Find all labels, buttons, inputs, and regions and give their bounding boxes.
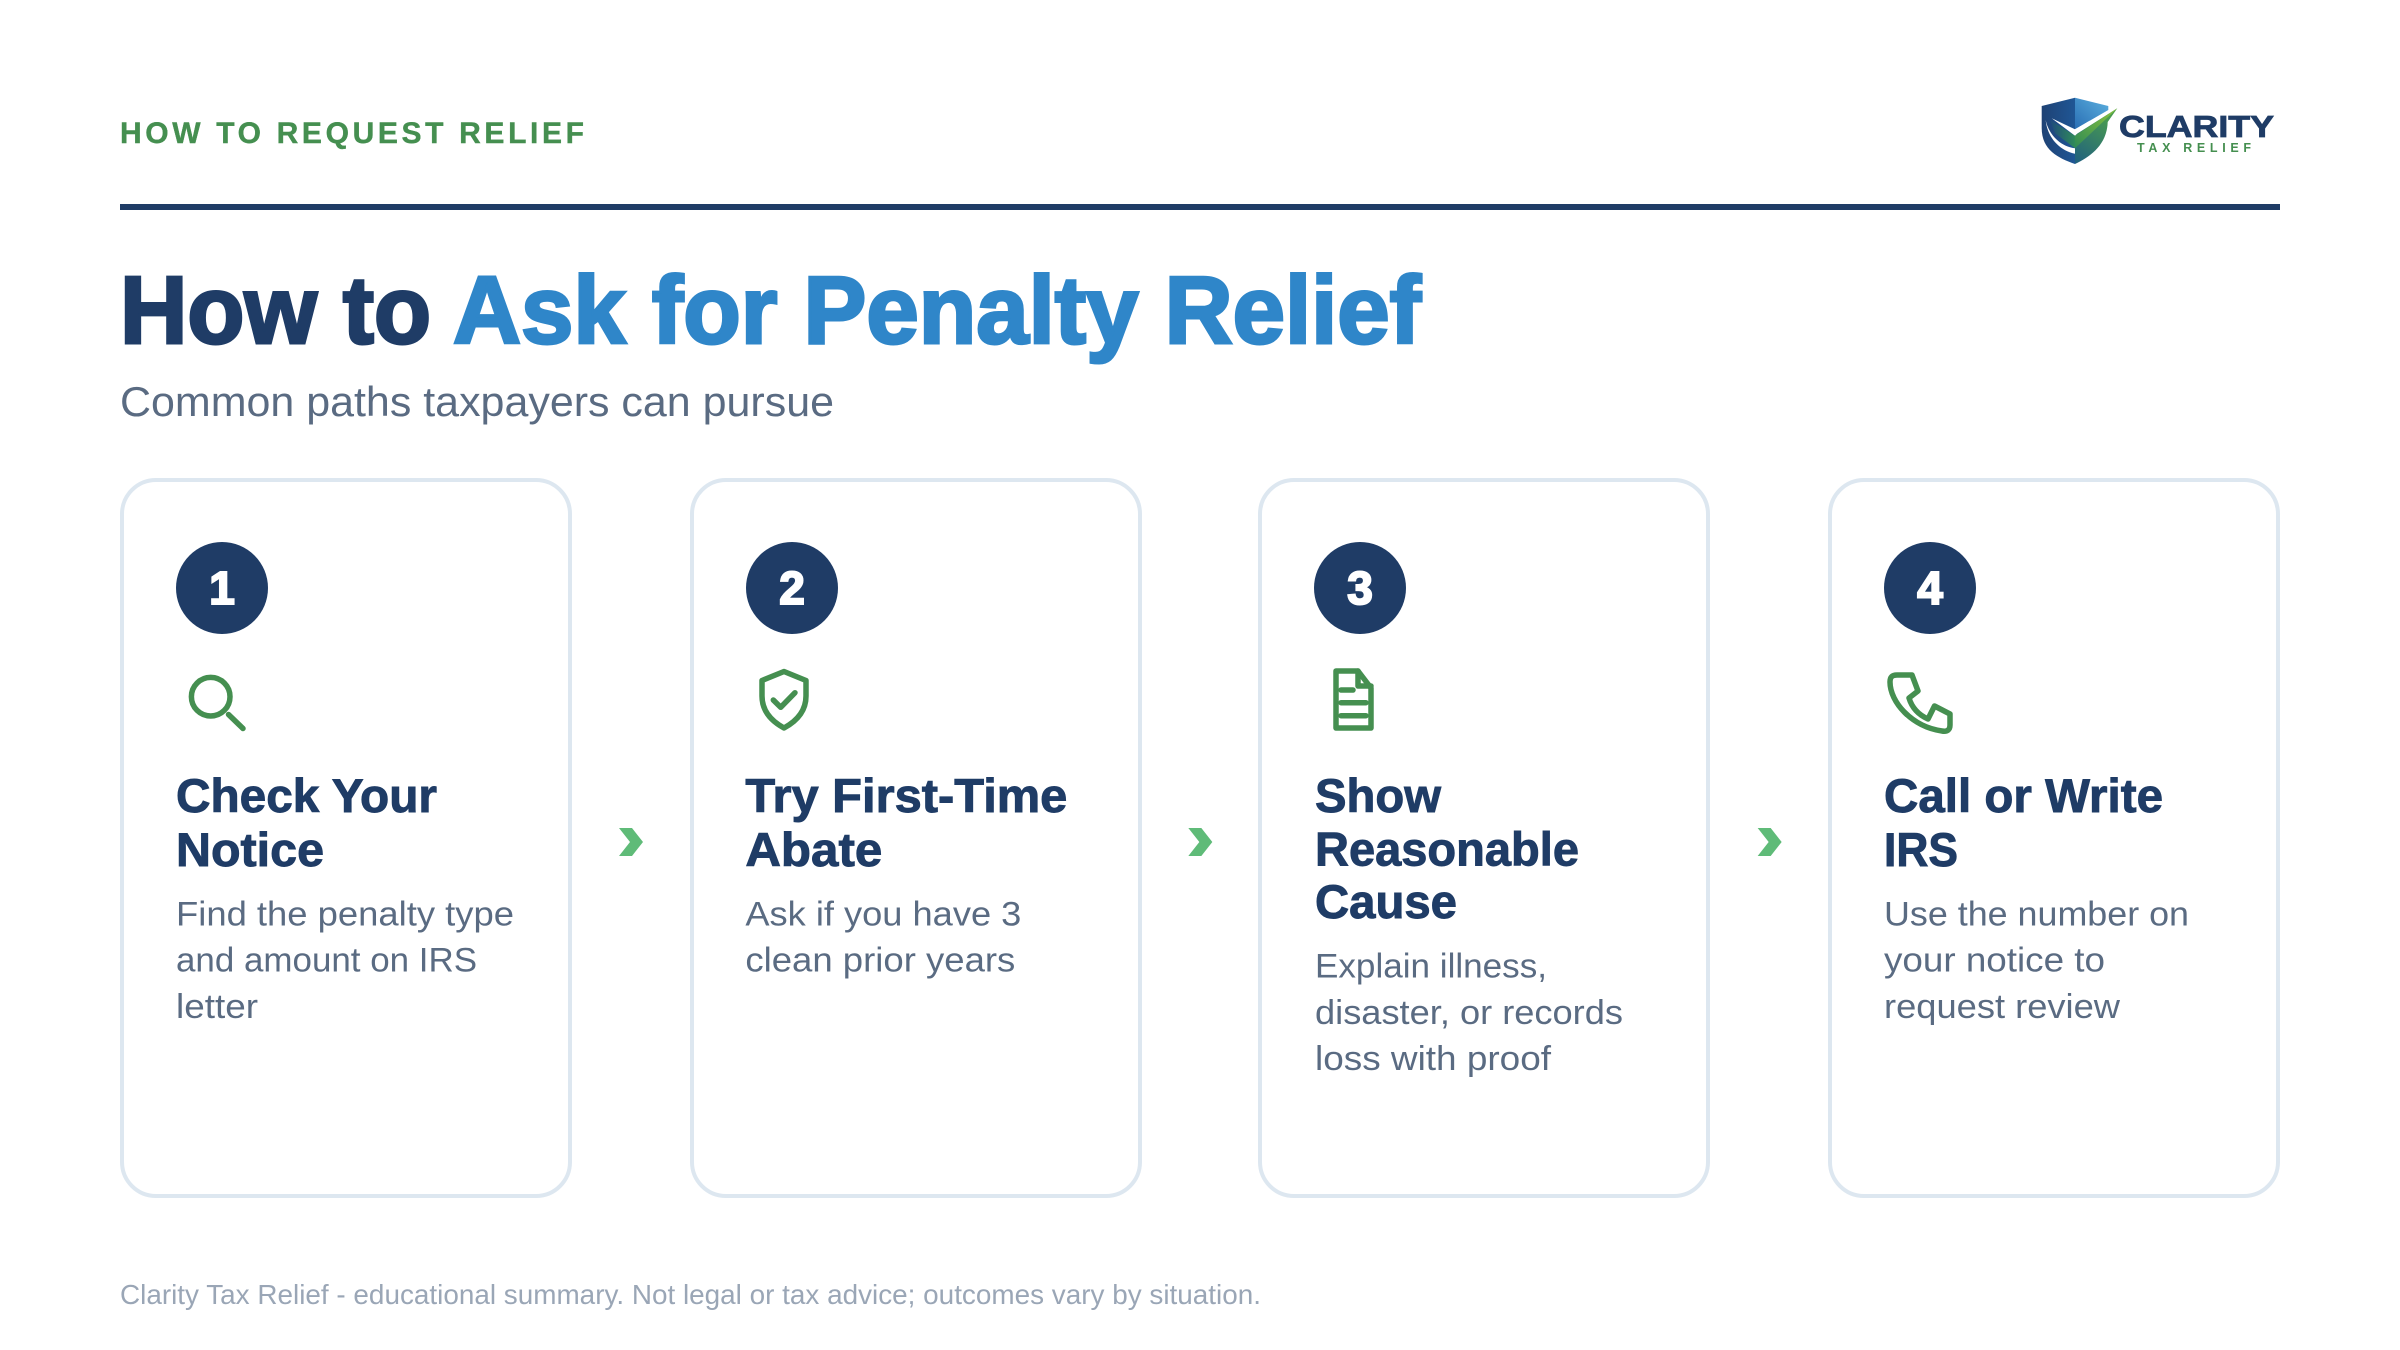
panel: step 1 check your notice: [122, 480, 570, 1196]
body text: Ask if you have 3: [745, 896, 1021, 934]
heading: check your notice: Check Your: [176, 769, 437, 822]
heading: show reasonable cause: [1315, 769, 1579, 928]
heading: call or write irs: IRS: [1884, 823, 1958, 876]
body text: disaster, or records: [1315, 994, 1623, 1032]
heading: check your notice: Notice: [176, 823, 324, 876]
step number 3: 3: [1347, 562, 1373, 614]
icon: phone: [1890, 675, 1950, 731]
step number 2: 2: [779, 562, 805, 614]
icon: magnifying glass: [191, 677, 243, 728]
body text: [1315, 948, 1623, 1078]
step number 2: [746, 542, 838, 634]
logo tagline: TAX RELIEF: [2137, 141, 2251, 155]
body text: loss with proof: [1315, 1040, 1552, 1078]
header rule: [120, 204, 2280, 210]
arrow 1: [619, 828, 643, 856]
logo shield mark: [2042, 98, 2117, 164]
body text: clean prior years: [745, 942, 1015, 980]
body text: Use the number on: [1884, 896, 2189, 934]
icon: shield check: [762, 672, 806, 728]
body text: request review: [1884, 988, 2120, 1026]
arrow 3: [1758, 828, 1782, 856]
icon: document: [1336, 671, 1371, 728]
heading: try first-time abate: Try First-Time: [745, 769, 1067, 822]
body text: Find the penalty type: [176, 896, 514, 934]
heading: show reasonable cause: Reasonable: [1315, 822, 1579, 876]
heading: show reasonable cause: Show: [1315, 769, 1441, 822]
heading: call or write irs: [1884, 769, 2163, 876]
title: How to: [120, 257, 431, 364]
subtitle: Common paths taxpayers can pursue: [120, 378, 834, 425]
arrow 2: [1188, 828, 1212, 856]
logo: Clarity Tax Relief: [2042, 98, 2274, 164]
step number 1: 1: [209, 562, 235, 614]
body text: letter: [176, 988, 258, 1026]
body text: [1884, 896, 2189, 1026]
step number 3: [1314, 542, 1406, 634]
panel: step 4 call or write irs: [1830, 480, 2278, 1196]
body text: [745, 896, 1021, 980]
heading: try first-time abate: [745, 769, 1067, 876]
body text: your notice to: [1884, 942, 2105, 980]
heading: try first-time abate: Abate: [745, 823, 882, 876]
eyebrow label: HOW TO REQUEST RELIEF: [120, 117, 584, 150]
step number 4: 4: [1917, 562, 1943, 614]
panel: step 3 show reasonable cause: [1260, 480, 1708, 1196]
heading: show reasonable cause: Cause: [1315, 875, 1457, 928]
heading: call or write irs: Call or Write: [1884, 769, 2163, 822]
body text: [176, 896, 514, 1026]
panel: step 2 try first-time abate: [692, 480, 1140, 1196]
heading: check your notice: [176, 769, 437, 876]
logo wordmark: CLARITY: [2119, 109, 2274, 144]
title: Ask for Penalty Relief: [453, 257, 1422, 364]
footer disclaimer: Clarity Tax Relief - educational summary. Not legal or tax advice; outcomes vary by situation.: [120, 1279, 1261, 1310]
body text: and amount on IRS: [176, 942, 477, 980]
step number 4: [1884, 542, 1976, 634]
step number 1: [176, 542, 268, 634]
body text: Explain illness,: [1315, 948, 1547, 986]
